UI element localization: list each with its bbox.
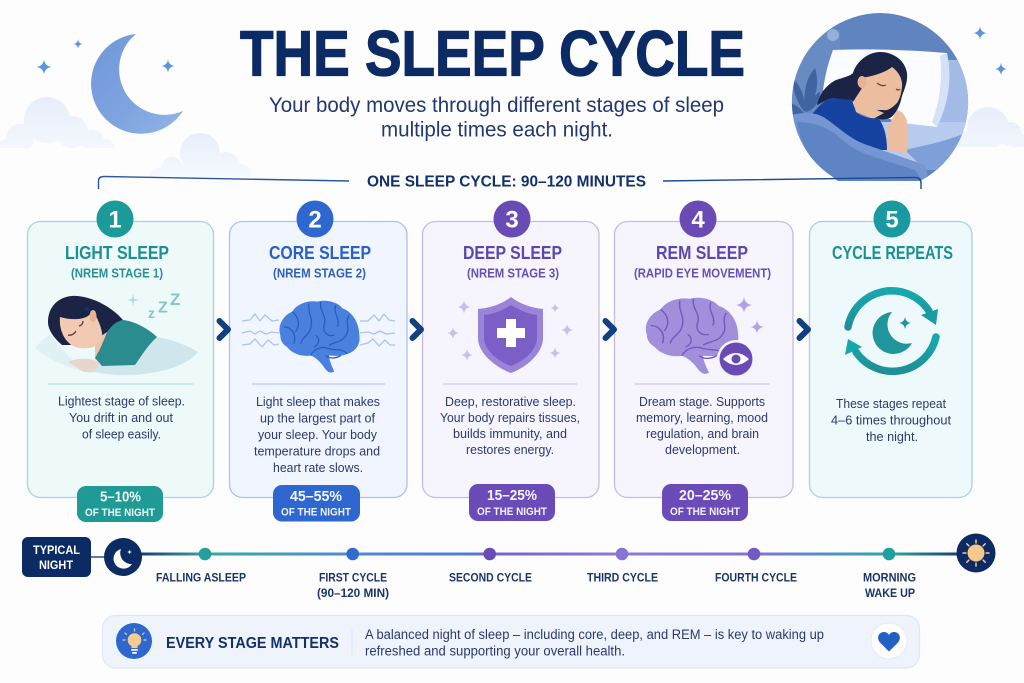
subtitle: [269, 93, 724, 142]
panel: deep sleep: [422, 200, 599, 521]
badge: 45-55%: [273, 485, 360, 522]
description: [440, 394, 580, 457]
label box: typical night: NIGHT: [39, 560, 73, 572]
heading: cycle duration: ONE SLEEP CYCLE: 90–120 MINUTES: [367, 174, 646, 190]
summary text: A balanced night of sleep – including core, deep, and REM – is key to waking up: [365, 627, 824, 642]
badge: 5-10%: 5–10%: [100, 488, 141, 506]
heading: REM sleep: REM SLEEP: [656, 243, 748, 263]
badge: 45-55%: 45–55%: [290, 488, 342, 505]
arrows: between panels: [220, 321, 808, 338]
number badge 5: [874, 200, 910, 238]
description: [636, 394, 768, 457]
heading: deep sleep: DEEP SLEEP: [463, 243, 562, 263]
summary text: refreshed and supporting your overall health.: [365, 644, 625, 658]
icon: night moon: [104, 538, 142, 576]
description: development.: [665, 442, 740, 457]
panel: light sleep: [28, 200, 214, 522]
illustration: sleeping woman in circle: [790, 12, 972, 185]
badge: 15-25%: 15–25%: [487, 487, 537, 504]
description: These stages repeat: [836, 396, 946, 411]
summary text: [365, 627, 824, 658]
description: Your body repairs tissues,: [440, 410, 580, 425]
description: restores energy.: [466, 442, 554, 457]
description: regulation, and brain: [646, 426, 759, 441]
number badge 4: [680, 200, 716, 238]
panel: core sleep: [230, 200, 407, 522]
heading: cycle repeats: CYCLE REPEATS: [832, 243, 953, 263]
divider: [635, 383, 770, 385]
illustration: sleeping woman: z: [148, 305, 155, 321]
subtitle: Your body moves through different stages of sleep: [269, 93, 724, 117]
subheading: (RAPID EYE MOVEMENT): [634, 266, 771, 280]
icon: heart: [871, 623, 907, 659]
illustration: brain with eye: [646, 297, 764, 378]
timeline labels: FALLING ASLEEP: [156, 572, 246, 584]
subtitle: multiple times each night.: [381, 118, 613, 142]
number badge 4: 4: [691, 206, 705, 234]
icon: light bulb: [116, 623, 152, 659]
divider: [252, 383, 385, 385]
description: your sleep. Your body: [258, 427, 377, 442]
description: temperature drops and: [254, 444, 380, 458]
timeline: typical night: [22, 534, 996, 600]
timeline labels: FOURTH CYCLE: [715, 572, 797, 584]
badge: 20-25%: OF THE NIGHT: [670, 506, 740, 518]
description: Dream stage. Supports: [639, 394, 765, 409]
subheading: (NREM STAGE 3): [467, 266, 559, 280]
number badge 1: 1: [108, 206, 122, 234]
divider: [443, 383, 577, 385]
illustration: shield with cross: [447, 297, 573, 373]
cloud: behind bracket: [150, 133, 250, 174]
icon: crescent moon: [91, 34, 183, 134]
track: [141, 552, 961, 556]
cloud: top right: [958, 107, 1024, 147]
title: THE SLEEP CYCLE: [240, 18, 745, 90]
panel: every stage matters: [102, 616, 920, 668]
heading: core sleep: CORE SLEEP: [269, 243, 371, 263]
icon: sun: [956, 534, 996, 572]
badge: 20-25%: 20–25%: [679, 487, 731, 504]
description: Lightest stage of sleep.: [58, 394, 185, 409]
bracket: one sleep cycle: [98, 176, 921, 189]
timeline labels: FIRST CYCLE: [319, 572, 387, 584]
description: [58, 394, 185, 441]
number badge 2: 2: [308, 206, 322, 234]
number badge 5: 5: [885, 206, 899, 234]
badge: 15-25%: [469, 484, 555, 521]
label box: typical night: TYPICAL: [33, 545, 80, 557]
illustration: sleeping woman: Z: [158, 300, 168, 316]
illustration: brain with waves: [242, 301, 395, 373]
panel: REM sleep: [614, 200, 793, 521]
timeline labels: WAKE UP: [865, 588, 915, 600]
subheading: (NREM STAGE 2): [273, 266, 366, 280]
description: the night.: [866, 429, 918, 444]
description: 4–6 times throughout: [831, 412, 951, 428]
badge: 45-55%: OF THE NIGHT: [281, 506, 351, 518]
timeline dots: [199, 548, 895, 560]
icons: stars around moon: [36, 26, 1007, 75]
divider: [48, 383, 193, 385]
number badge 3: [494, 200, 530, 238]
badge: 5-10%: OF THE NIGHT: [85, 507, 155, 519]
description: Light sleep that makes: [256, 394, 380, 409]
description: [831, 396, 951, 444]
number badge 1: [96, 200, 134, 238]
heading: light sleep: LIGHT SLEEP: [65, 243, 169, 263]
number badge 2: [296, 200, 334, 238]
description: [254, 394, 380, 475]
timeline labels: THIRD CYCLE: [587, 572, 658, 584]
timeline labels: (90–120 MIN): [317, 588, 389, 600]
timeline labels: MORNING: [863, 572, 916, 584]
description: You drift in and out: [69, 410, 173, 425]
badge: 5-10%: [77, 486, 163, 522]
heading: every stage matters: EVERY STAGE MATTERS: [166, 635, 339, 652]
illustration: sleeping woman: [35, 290, 198, 375]
badge: 15-25%: OF THE NIGHT: [477, 506, 547, 518]
illustration: sleeping woman: Z: [170, 290, 180, 309]
description: heart rate slows.: [273, 460, 363, 475]
cloud: top left: [0, 97, 114, 148]
badge: 20-25%: [662, 484, 748, 521]
description: Deep, restorative sleep.: [445, 394, 576, 409]
description: up the largest part of: [260, 410, 375, 426]
description: memory, learning, mood: [636, 410, 768, 425]
icon: cycle arrows with moon: [845, 291, 938, 371]
description: builds immunity, and: [453, 426, 567, 441]
panel: cycle repeats: [810, 200, 972, 498]
timeline labels: [156, 572, 916, 600]
timeline labels: SECOND CYCLE: [449, 572, 532, 584]
label box: typical night: [22, 537, 91, 577]
number badge 3: 3: [505, 206, 519, 234]
subheading: (NREM STAGE 1): [71, 266, 163, 280]
description: of sleep easily.: [82, 426, 161, 441]
